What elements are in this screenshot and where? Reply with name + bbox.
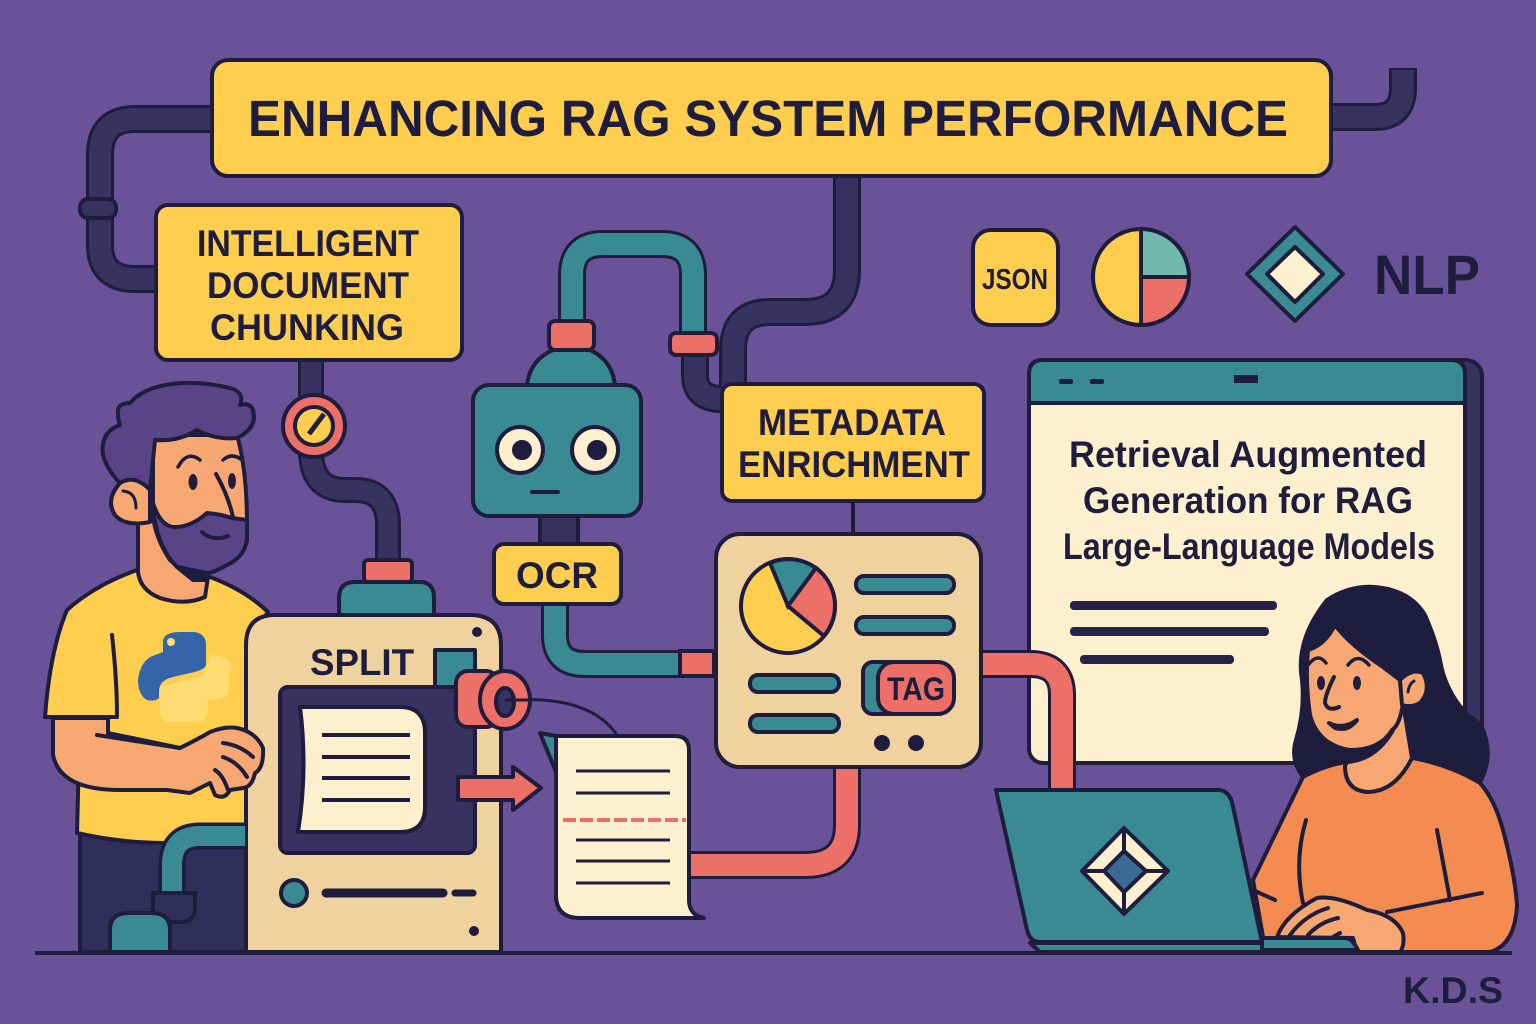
machine: splitter: SPLIT bbox=[310, 642, 414, 683]
dashboard pie chart bbox=[741, 559, 835, 653]
coral pipe to laptop bbox=[980, 664, 1062, 795]
pipe and valve at base of man bbox=[110, 836, 245, 952]
title: ENHANCING RAG SYSTEM PERFORMANCE bbox=[248, 90, 1288, 147]
person: woman in orange sweater bbox=[1253, 587, 1517, 952]
dark and teal pipes bbox=[100, 68, 1403, 865]
document: chunked page bbox=[540, 733, 704, 918]
label: intelligent document chunking: CHUNKING bbox=[210, 307, 404, 348]
label: metadata enrichment: METADATA bbox=[758, 402, 946, 443]
machine: splitter bbox=[246, 560, 501, 952]
panel: presentation screen: Retrieval Augmented bbox=[1069, 434, 1427, 475]
icon: laptop diamond logo bbox=[1082, 828, 1168, 914]
panel: metadata dashboard bbox=[716, 534, 981, 767]
arrow: split to document bbox=[458, 767, 541, 810]
person: man in yellow shirt bbox=[45, 383, 268, 952]
icon: JSON badge bbox=[973, 230, 1058, 325]
icon: paper roller bbox=[456, 671, 617, 735]
label: OCR: OCR bbox=[516, 555, 598, 596]
panel: presentation screen: Large-Language Models bbox=[1063, 526, 1435, 567]
arm and hand of man bbox=[53, 718, 263, 797]
signature: K.D.S bbox=[1403, 970, 1503, 1011]
label: OCR bbox=[494, 544, 621, 604]
icon: python logo bbox=[138, 632, 230, 722]
label: intelligent document chunking: DOCUMENT bbox=[207, 265, 409, 306]
label: metadata enrichment bbox=[722, 384, 984, 535]
label: intelligent document chunking: INTELLIGENT bbox=[197, 223, 419, 264]
laptop bbox=[996, 790, 1358, 952]
pipe connectors bbox=[80, 199, 717, 676]
icon: JSON badge: JSON bbox=[982, 264, 1048, 296]
panel: presentation screen: Generation for RAG bbox=[1083, 480, 1413, 521]
robot OCR unit bbox=[473, 321, 641, 545]
panel: metadata dashboard: TAG bbox=[887, 671, 945, 707]
title bbox=[212, 60, 1331, 176]
icon: pie chart bbox=[1093, 229, 1189, 325]
ground line bbox=[35, 951, 1512, 955]
icon: pressure gauge bbox=[283, 395, 345, 457]
label: metadata enrichment: ENRICHMENT bbox=[738, 444, 970, 485]
panel: presentation screen bbox=[1029, 360, 1482, 763]
NLP label: NLP bbox=[1374, 243, 1480, 306]
icon: diamond bbox=[1247, 227, 1343, 321]
label: intelligent document chunking bbox=[156, 205, 462, 360]
